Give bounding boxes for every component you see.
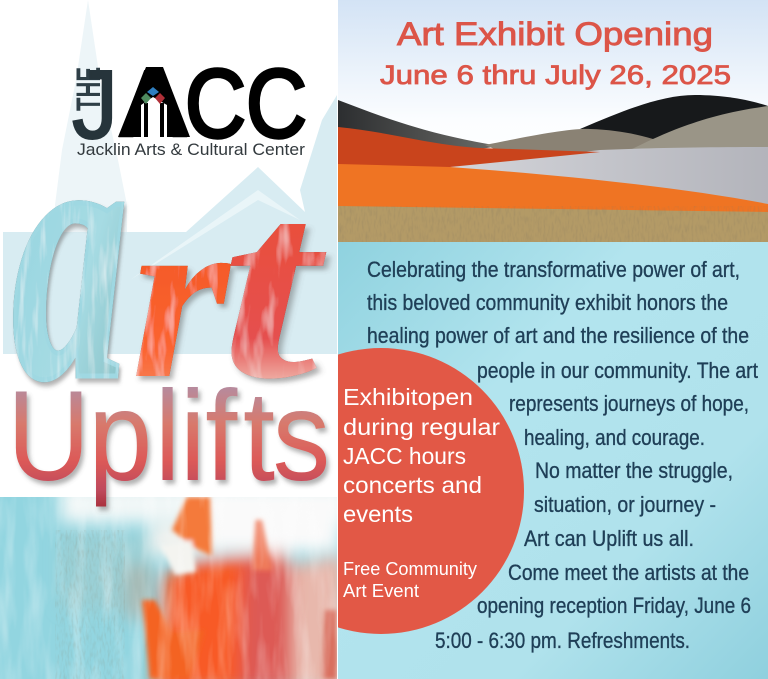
heading: Art: a (12, 48, 128, 456)
icon: stained glass arch window (141, 87, 167, 137)
text block: exhibit description: No matter the struggle, (535, 458, 733, 483)
subheading: dates: June 6 thru July 26, 2025 (380, 60, 731, 90)
callout: red circle (338, 348, 524, 634)
sky (338, 0, 768, 106)
heading: Art (12, 48, 330, 456)
heading: Uplifts: Uplifts (7, 364, 330, 507)
panel: church backdrop (0, 0, 338, 497)
heading: Art Exhibit Opening: Art Exhibit Opening (397, 16, 713, 52)
text block: exhibit description: 5:00 - 6:30 pm. Refreshments. (435, 628, 690, 653)
callout text: free event (343, 559, 477, 601)
icon: church spire (55, 0, 127, 232)
callout text: exhibit hours: events (343, 501, 413, 527)
logo word THE: THE (70, 67, 108, 111)
callout text: free event: Free Community (343, 559, 477, 579)
logo word JACC (72, 49, 307, 159)
panel: landscape banner (338, 0, 768, 242)
logo word JACC: A (116, 49, 190, 158)
panel: teal description area (338, 242, 768, 679)
text block: exhibit description: this beloved community exhibit honors the (367, 290, 728, 315)
callout text: exhibit hours (343, 384, 500, 527)
heading: Art: r (131, 163, 231, 429)
logo word JACC: J (72, 50, 118, 159)
logo subtitle: Jacklin Arts & Cultural Center (77, 140, 305, 159)
text block: exhibit description: healing, and courage. (524, 425, 705, 450)
callout text: free event: Art Event (343, 581, 419, 601)
heading: Art: t (220, 135, 330, 435)
callout text: exhibit hours: Exhibitopen (343, 384, 473, 410)
text block: exhibit description: Art can Uplift us all. (524, 526, 694, 551)
callout text: exhibit hours: concerts and (343, 472, 482, 498)
panel: abstract painting (0, 485, 350, 679)
logo word JACC: CC (185, 49, 307, 158)
logo: The JACC (70, 49, 307, 159)
callout text: exhibit hours: JACC hours (343, 443, 466, 469)
text block: exhibit description: situation, or journey - (534, 492, 716, 517)
text block: exhibit description (367, 257, 758, 653)
hills (338, 95, 768, 242)
callout text: exhibit hours: during regular (343, 414, 500, 440)
